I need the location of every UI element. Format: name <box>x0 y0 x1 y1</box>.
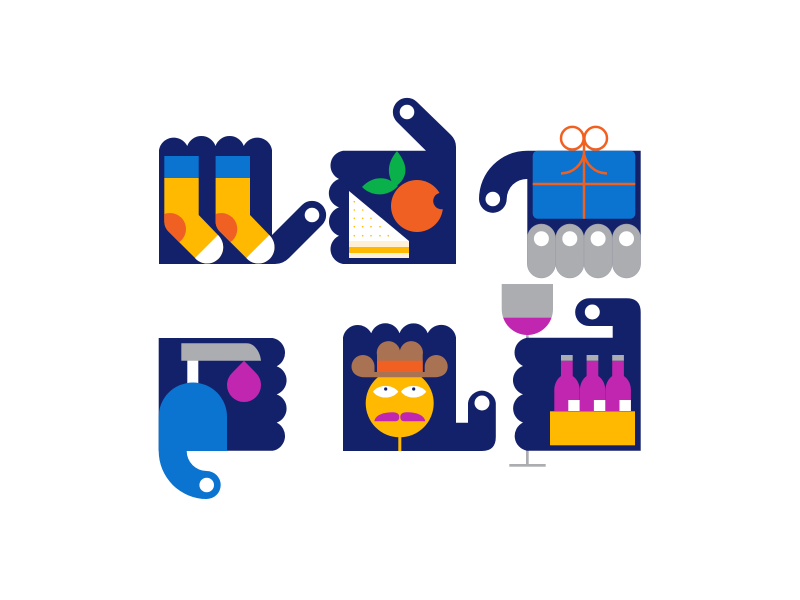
blue arm <box>159 383 227 499</box>
thumb hole <box>305 208 319 222</box>
bottle 1 <box>554 355 580 411</box>
hand with arm curving down-left <box>479 151 641 240</box>
gray fingers with holes <box>527 224 641 278</box>
leaves <box>362 151 405 194</box>
face <box>366 369 434 437</box>
hand with fingers right <box>159 338 287 451</box>
hand 4: under a faucet <box>159 338 287 499</box>
hand with fingers left and thumb on top <box>513 298 641 451</box>
bottle 3 <box>606 355 631 411</box>
crate <box>550 411 635 445</box>
moustache <box>374 412 425 421</box>
illustration: six hands holding objects <box>158 98 641 499</box>
bottle 2 <box>580 355 605 411</box>
stick <box>398 430 401 451</box>
hand 2: holding sandwich and orange <box>329 98 456 264</box>
orange with bite <box>391 180 450 232</box>
faucet spout <box>181 343 261 361</box>
hand 5: holding face on a stick <box>343 323 496 451</box>
water drop <box>227 361 261 402</box>
hand 6: holding crate of wine <box>513 298 641 451</box>
thumb hole <box>400 105 414 119</box>
hat <box>352 341 448 377</box>
thumb hole <box>474 396 490 410</box>
sock right <box>216 156 274 264</box>
ribbon and bow <box>533 127 635 219</box>
hand 1: holding socks <box>154 136 326 270</box>
sock left <box>164 156 224 264</box>
hand with four fingers up and thumb <box>343 323 496 451</box>
wine glass <box>500 283 555 467</box>
thumb hole <box>585 304 600 320</box>
eyes <box>373 386 426 398</box>
gift box <box>533 151 635 219</box>
stem and base <box>526 330 529 465</box>
arm hole <box>199 478 214 492</box>
hand 3: holding gift box <box>479 127 641 278</box>
bowl with wine <box>502 284 553 335</box>
hand with fingers left and thumb up <box>329 98 456 264</box>
sandwich <box>349 191 409 258</box>
thumb hole <box>486 192 500 206</box>
faucet pipe <box>187 360 198 384</box>
hand with four fingers up and thumb <box>159 136 326 264</box>
